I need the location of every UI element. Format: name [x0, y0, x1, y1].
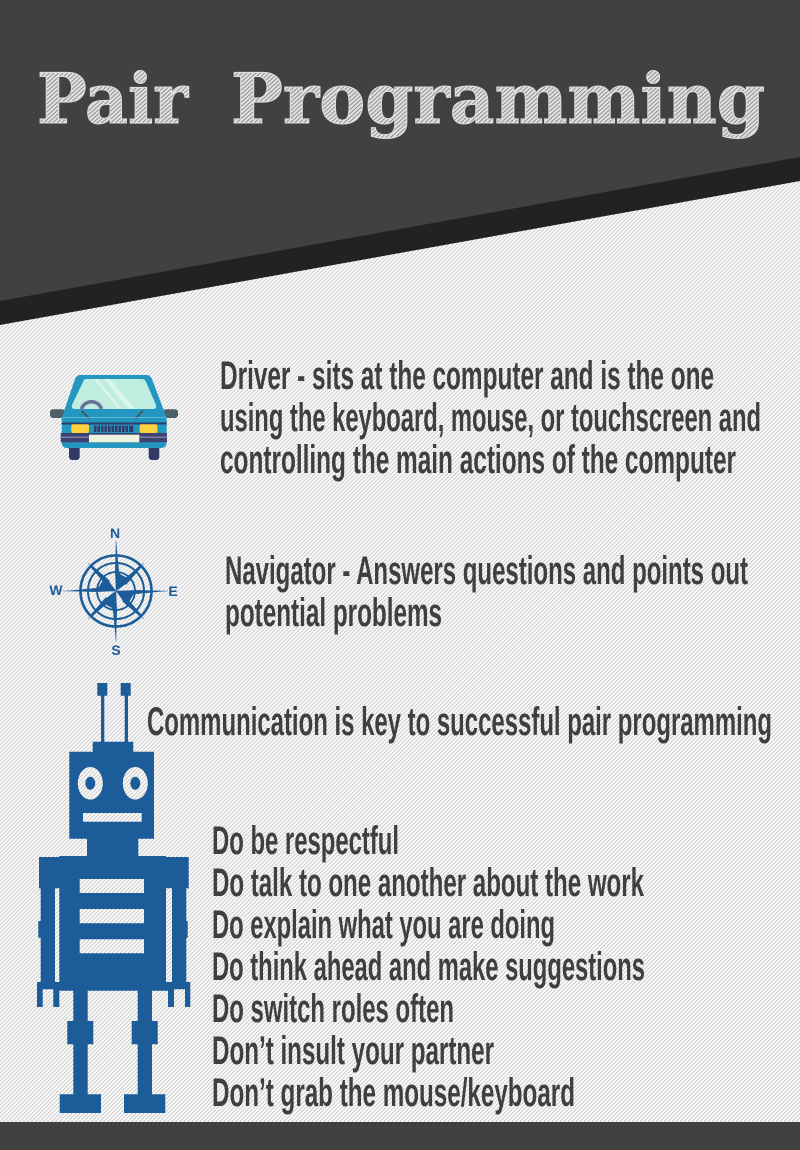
list: do and don't: Do explain what you are doing — [212, 903, 555, 947]
compass letters — [49, 525, 178, 658]
title: Programming — [231, 59, 765, 140]
footer bar — [0, 1122, 800, 1150]
header dark area — [0, 0, 800, 301]
list: do and don't — [212, 819, 645, 1115]
list: do and don't: Don’t insult your partner — [212, 1029, 494, 1073]
icon: robot — [37, 683, 190, 1113]
list: do and don't: Do switch roles often — [212, 987, 454, 1031]
list: do and don't: Do be respectful — [212, 819, 399, 863]
header shadow band — [0, 136, 800, 325]
header panel — [0, 0, 800, 325]
compass letters: N — [110, 525, 120, 541]
compass letters: S — [111, 642, 121, 658]
compass letters: E — [168, 583, 178, 599]
compass letters: W — [49, 582, 63, 598]
title: Pair — [37, 59, 190, 140]
text: driver description — [220, 354, 761, 482]
text: navigator description — [225, 549, 748, 635]
icon: car — [50, 375, 178, 460]
icon: compass — [49, 525, 178, 658]
list: do and don't: Don’t grab the mouse/keyboard — [212, 1071, 575, 1115]
text: navigator description: potential problems — [225, 591, 442, 635]
